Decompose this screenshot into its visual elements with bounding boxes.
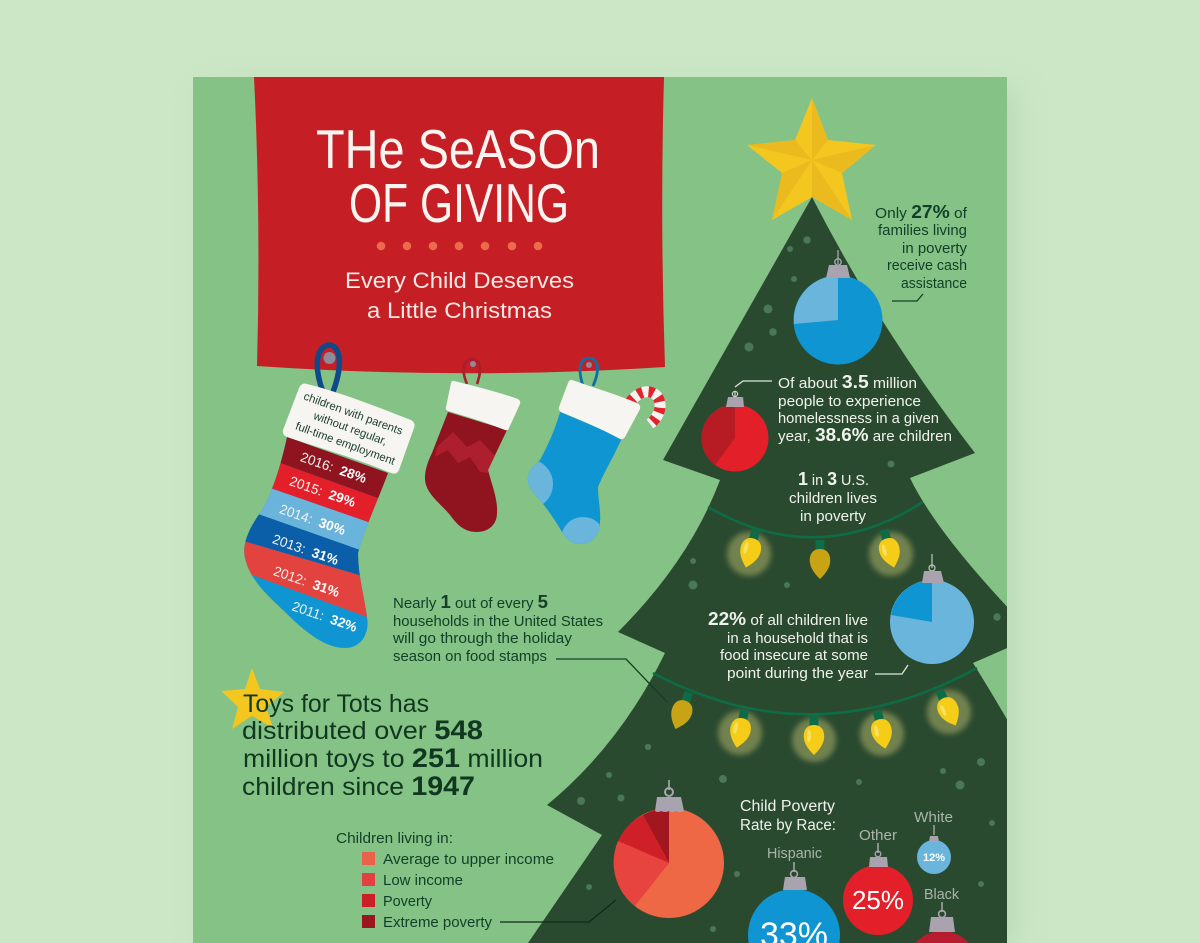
red stocking	[425, 359, 520, 532]
subtitle	[345, 268, 574, 323]
bulb	[727, 707, 755, 750]
text: cash assistance: Only 27% of	[875, 202, 968, 222]
legend: Extreme poverty	[383, 914, 492, 931]
text: child poverty by race: Child Poverty	[740, 798, 835, 815]
text: food stamps: households in the United States	[393, 614, 603, 630]
bulb	[736, 527, 766, 570]
text: homelessness: Of about 3.5 million	[778, 372, 917, 392]
text: cash assistance: assistance	[901, 276, 967, 292]
cuff	[283, 384, 415, 474]
text: child poverty by race	[740, 798, 836, 834]
strand of lights: upper	[708, 502, 923, 579]
text: homelessness: homelessness in a given	[778, 411, 939, 427]
legend	[336, 830, 554, 931]
cuff text: without regular,	[311, 410, 388, 448]
ornament: homelessness	[701, 391, 768, 472]
strand of lights: lower	[653, 668, 977, 762]
text: food insecure: food insecure at some	[720, 648, 868, 664]
leader: cash assistance	[892, 294, 923, 301]
leader: legend	[500, 900, 616, 922]
tree	[528, 197, 1012, 943]
ornament: Other: Other	[859, 828, 897, 844]
text: food insecure: in a household that is	[727, 631, 868, 647]
text: cash assistance: receive cash	[887, 258, 967, 274]
text: cash assistance	[875, 202, 968, 292]
tree dots	[577, 236, 1001, 932]
ornament: Hispanic: Hispanic	[767, 846, 822, 862]
bulb	[804, 716, 824, 755]
text: food insecure	[708, 609, 868, 682]
title: OF GIVING	[349, 172, 569, 234]
text: toys for tots: distributed over 548	[242, 715, 483, 745]
yearly stripes text: 2011: 32%	[290, 599, 359, 635]
ornament: White: 12%	[923, 852, 945, 864]
subtitle: a Little Christmas	[367, 298, 552, 323]
legend: Poverty	[383, 893, 432, 910]
cuff text	[294, 391, 404, 468]
text: toys for tots: Toys for Tots has	[243, 690, 429, 718]
ornament: Black: Black	[924, 887, 960, 903]
leader: food stamps	[556, 659, 667, 702]
poster panel	[193, 77, 1007, 943]
yearly stripes text: 2014: 30%	[277, 501, 347, 538]
text: toys for tots: children since 1947	[242, 771, 475, 801]
text: food insecure: 22% of all children live	[708, 609, 868, 629]
banner dots	[377, 242, 542, 250]
legend: Low income	[383, 872, 463, 889]
bulb	[867, 708, 895, 751]
text: 1 in 3 children: 1 in 3 U.S.	[798, 469, 869, 489]
banner	[254, 77, 665, 373]
text: child poverty by race: Rate by Race:	[740, 817, 836, 834]
bulb	[874, 527, 904, 570]
ornament: Hispanic	[748, 846, 840, 943]
ornament: food insecure	[890, 554, 974, 664]
ornament: White: White	[914, 810, 953, 826]
candy cane	[630, 392, 660, 424]
title	[316, 118, 600, 234]
legend: Average to upper income	[383, 851, 554, 868]
ornament: income pie	[614, 780, 724, 918]
ornament: Other	[843, 828, 913, 935]
yearly stripes text: 2012: 31%	[271, 563, 341, 600]
loop	[317, 345, 339, 392]
title: THe SeASOn	[316, 118, 600, 180]
text: food insecure: point during the year	[727, 666, 868, 682]
light glows	[718, 690, 971, 762]
ornament: Black	[915, 887, 969, 943]
bulb	[666, 689, 698, 733]
ornament: 27% cash assistance	[794, 250, 882, 364]
cuff text: full-time employment	[294, 421, 397, 468]
bulb	[930, 686, 965, 730]
yearly stripes text: 2013: 31%	[270, 531, 340, 568]
text: food stamps: will go through the holiday	[392, 631, 573, 647]
big stocking	[230, 345, 415, 655]
ornament: Other: 25%	[852, 885, 904, 915]
poster shadow	[203, 87, 1017, 943]
leader: homelessness	[735, 381, 772, 387]
text: food stamps: Nearly 1 out of every 5	[393, 592, 548, 612]
ornament: White	[914, 810, 953, 874]
text: food stamps	[392, 592, 603, 665]
text: 1 in 3 children: in poverty	[800, 509, 867, 525]
text: homelessness: year, 38.6% are children	[778, 425, 952, 445]
bulb	[810, 540, 830, 579]
subtitle: Every Child Deserves	[345, 268, 574, 293]
blue stocking	[528, 356, 666, 544]
leader: food insecure	[875, 665, 908, 674]
text: homelessness	[778, 372, 952, 445]
legend: Children living in:	[336, 830, 453, 847]
text: cash assistance: in poverty	[902, 241, 968, 257]
text: food stamps: season on food stamps	[393, 649, 547, 665]
text: 1 in 3 children: children lives	[789, 491, 877, 507]
yearly stripes text: 2016: 28%	[298, 449, 368, 486]
text: cash assistance: families living	[878, 223, 967, 239]
text: toys for tots: million toys to 251 million	[243, 743, 543, 773]
text: homelessness: people to experience	[778, 394, 921, 410]
yearly stripes text	[270, 449, 368, 635]
text: 1 in 3 children	[789, 469, 877, 525]
light glows	[727, 532, 913, 576]
yearly stripes text: 2015: 29%	[287, 473, 357, 510]
tree-top star	[747, 98, 876, 220]
text: toys for tots	[242, 690, 543, 801]
cuff text: children with parents	[302, 391, 404, 438]
small star	[221, 668, 284, 729]
